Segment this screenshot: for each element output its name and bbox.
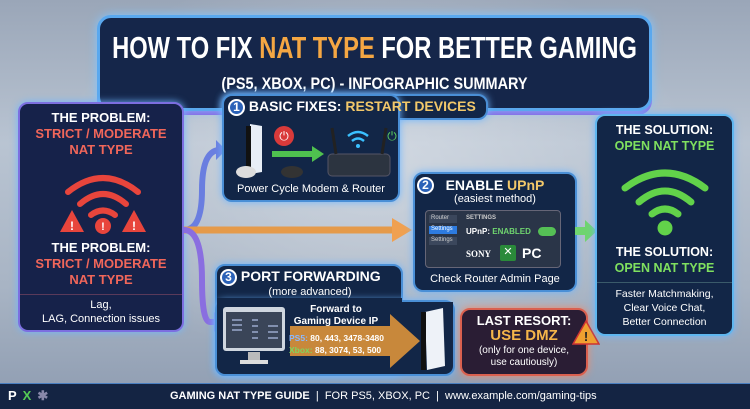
problem heading	[35, 110, 167, 157]
icon: monitor	[223, 307, 285, 364]
solution text: Faster Matchmaking,	[615, 288, 714, 300]
settings screen	[425, 210, 561, 268]
icon: PS5	[421, 308, 445, 370]
icon: red wifi warning: !	[101, 221, 105, 233]
panel: step 3: (more advanced)	[268, 286, 352, 298]
solution heading repeat: THE SOLUTION:	[616, 245, 713, 259]
settings screen: Settings	[431, 226, 453, 232]
footer	[0, 383, 750, 409]
problem text: Lag,	[90, 299, 112, 311]
problem heading repeat: THE PROBLEM:	[52, 240, 150, 255]
panel: step 1	[215, 87, 494, 208]
panel: solution	[595, 114, 734, 336]
icon: console and router: ⏻	[387, 129, 397, 143]
panel: step 2: (easiest method)	[454, 193, 536, 205]
solution heading	[615, 123, 714, 153]
icon: red wifi warning: !	[132, 219, 136, 233]
panel: last resort: use cautiously)	[491, 357, 557, 368]
settings screen: PC	[522, 245, 541, 261]
problem heading: STRICT / MODERATE	[35, 126, 167, 141]
panel: last resort: USE DMZ	[490, 327, 558, 344]
panel: last resort: LAST RESORT:	[477, 313, 571, 328]
icon: red wifi warning: !	[70, 219, 74, 233]
solution heading: THE SOLUTION:	[616, 123, 713, 137]
arrow: forward	[290, 314, 420, 368]
step 3 heading: 3	[225, 270, 232, 284]
settings screen: SONY	[466, 249, 491, 259]
problem text: LAG, Connection issues	[42, 313, 160, 325]
arrow: to step 2	[184, 218, 412, 242]
step 2 heading: 2	[422, 178, 429, 192]
arrow: to step 3	[184, 230, 224, 332]
arrow: to solution	[575, 220, 595, 242]
panel: step 3: Xbox: 88, 3074, 53, 500	[289, 345, 381, 355]
icon: warning: !	[584, 329, 588, 344]
solution text	[597, 282, 732, 329]
step 3 heading: PORT FORWARDING	[241, 268, 381, 284]
settings screen: UPnP: ENABLED	[466, 227, 531, 236]
solution text: Better Connection	[622, 316, 707, 328]
problem heading: THE PROBLEM:	[52, 110, 150, 125]
panel: step 2	[413, 172, 577, 292]
settings screen: ✕	[503, 246, 513, 258]
solution heading repeat	[615, 245, 714, 275]
panel: problem	[18, 102, 184, 332]
icon: console and router: ⏻	[279, 129, 289, 143]
solution heading repeat: OPEN NAT TYPE	[615, 261, 714, 275]
solution heading: OPEN NAT TYPE	[615, 139, 714, 153]
step 1 heading: BASIC FIXES: RESTART DEVICES	[249, 98, 476, 114]
arrows from problem	[184, 140, 412, 332]
icon: green wifi	[622, 169, 708, 236]
problem heading repeat: NAT TYPE	[69, 272, 133, 287]
solution text: Clear Voice Chat,	[624, 302, 705, 314]
forward text: Gaming Device IP	[294, 316, 378, 327]
panel: step 3	[209, 259, 459, 382]
icon: warning	[572, 320, 600, 345]
problem heading repeat: STRICT / MODERATE	[35, 256, 167, 271]
footer icons: PX✱	[8, 388, 54, 403]
forward text: Forward to	[310, 304, 362, 315]
settings screen: Settings	[431, 237, 453, 243]
arrow: to step 1	[184, 140, 226, 230]
step 1 caption: Power Cycle Modem & Router	[237, 183, 385, 195]
problem heading: NAT TYPE	[69, 142, 133, 157]
icon: console and router	[236, 124, 397, 178]
settings screen: Router	[431, 215, 449, 221]
subtitle: (PS5, XBOX, PC) - INFOGRAPHIC SUMMARY	[221, 74, 528, 93]
icon: red wifi warning	[60, 174, 146, 234]
footer text: GAMING NAT TYPE GUIDE | FOR PS5, XBOX, PC | www.example.com/gaming-tips	[170, 390, 597, 402]
title banner	[97, 15, 652, 111]
problem heading repeat	[35, 240, 167, 287]
forward text	[294, 304, 378, 327]
panel: step 3: PS5: 80, 443, 3478-3480	[289, 333, 384, 343]
panel: last resort: (only for one device,	[479, 345, 569, 356]
settings screen: SETTINGS	[466, 215, 496, 221]
step 2 caption: Check Router Admin Page	[430, 273, 560, 285]
panel: last resort	[460, 308, 588, 376]
step 2 heading: ENABLE UPnP	[446, 177, 544, 193]
step 1 heading: 1	[233, 100, 240, 114]
title: HOW TO FIX NAT TYPE FOR BETTER GAMING	[112, 30, 637, 65]
problem text	[20, 294, 182, 326]
